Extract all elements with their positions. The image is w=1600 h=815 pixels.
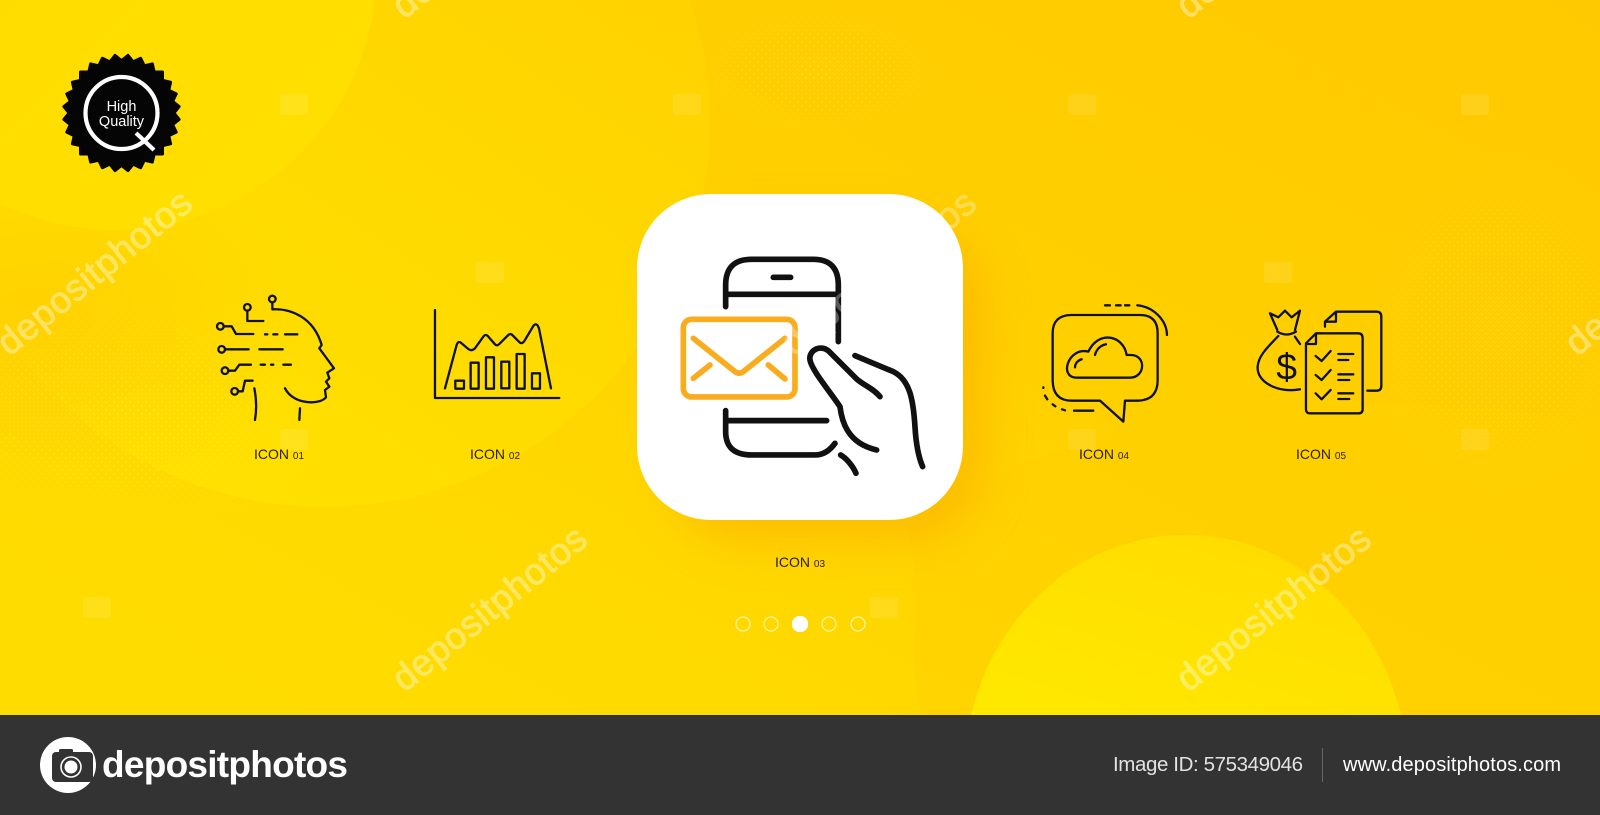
camera watermark grid [83,94,1489,618]
label icon 02: ICON 02 [470,446,520,462]
phone [726,259,838,455]
badge: high quality: High [107,99,136,115]
depositphotos watermarks: depositphotos [1168,517,1379,699]
depositphotos watermarks: depositphotos [384,517,595,699]
envelope [683,319,795,397]
icon 03: phone with mail [683,259,923,473]
label icon 04: ICON 04 [1079,446,1129,462]
pagination dots [736,616,865,632]
depositphotos watermarks: depositphotos [773,181,984,363]
label icon 05: ICON 05 [1296,446,1346,462]
icon 04: cloud chat [1043,305,1167,422]
image id: Image ID: 575349046 [1113,753,1303,776]
footer logo [40,737,348,793]
icon 01: AI head [217,296,334,420]
hand [810,348,923,473]
icon 02: chart [435,310,559,398]
label icon 03: ICON 03 [775,554,825,570]
footer logo: depositphotos [102,744,348,785]
label icon 01: ICON 01 [254,446,304,462]
icon 05: money bag and documents [1258,311,1381,413]
white card [637,194,963,520]
white card shadow [665,222,985,542]
website: www.depositphotos.com [1342,754,1561,776]
badge: high quality [64,55,179,171]
badge: high quality: Quality [99,114,145,130]
footer bar [0,715,1600,815]
icon 05: money bag and documents: $ [1276,345,1297,387]
